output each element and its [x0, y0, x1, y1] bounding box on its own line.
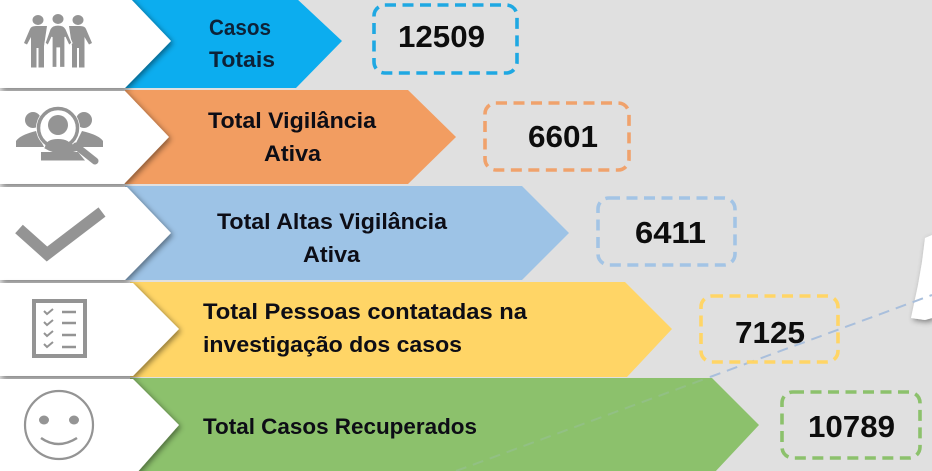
- value box: 12509: 12509: [398, 19, 485, 54]
- connector dashed line: [456, 295, 932, 471]
- white tab: row 2: [0, 91, 169, 184]
- label: total vigilancia ativa: [208, 108, 377, 166]
- white tab: row 3: [0, 187, 171, 280]
- label: casos totais: Totais: [209, 47, 275, 72]
- value box: 6601: 6601: [528, 119, 598, 154]
- white tab: row 4: [0, 283, 179, 376]
- value box: 7125: [701, 296, 838, 362]
- value box: 6411: [598, 198, 735, 265]
- panel: vigilancia ativa arrow: [125, 90, 456, 184]
- label: total vigilancia ativa: Ativa: [264, 141, 322, 166]
- panel: casos totais arrow: [125, 0, 342, 88]
- panel: altas vigilancia arrow: [125, 186, 569, 280]
- label: total pessoas contatadas: [203, 299, 528, 357]
- label: total vigilancia ativa: Total Vigilância: [208, 108, 377, 133]
- icon: three people: [24, 14, 92, 68]
- icon: check mark: [19, 212, 102, 254]
- icon: checklist: [34, 301, 85, 356]
- label: total altas vigilancia ativa: Ativa: [303, 242, 361, 267]
- map fragment: [911, 235, 932, 320]
- icon: smiley: [25, 391, 93, 459]
- panel: casos recuperados arrow: [130, 378, 759, 471]
- value box: 10789: 10789: [808, 409, 895, 444]
- label: total pessoas contatadas: Total Pessoas contatadas na: [203, 299, 528, 324]
- label: total pessoas contatadas: investigação dos casos: [203, 332, 462, 357]
- label: total altas vigilancia ativa: [217, 209, 448, 267]
- label: casos totais: [209, 15, 275, 72]
- label: total casos recuperados: Total Casos Recuperados: [203, 414, 477, 439]
- white tab: row 5: [0, 379, 179, 471]
- value box: 7125: 7125: [735, 315, 805, 350]
- label: total altas vigilancia ativa: Total Altas Vigilância: [217, 209, 448, 234]
- value box: 6601: [485, 103, 629, 170]
- panel: pessoas contatadas arrow: [130, 282, 672, 377]
- value box: 6411: 6411: [635, 215, 706, 250]
- label: casos totais: Casos: [209, 15, 271, 40]
- value box: 12509: [374, 5, 517, 73]
- white tab: row 1: [0, 0, 171, 88]
- icon: magnifier over people: [16, 106, 103, 161]
- value box: 10789: [782, 392, 920, 458]
